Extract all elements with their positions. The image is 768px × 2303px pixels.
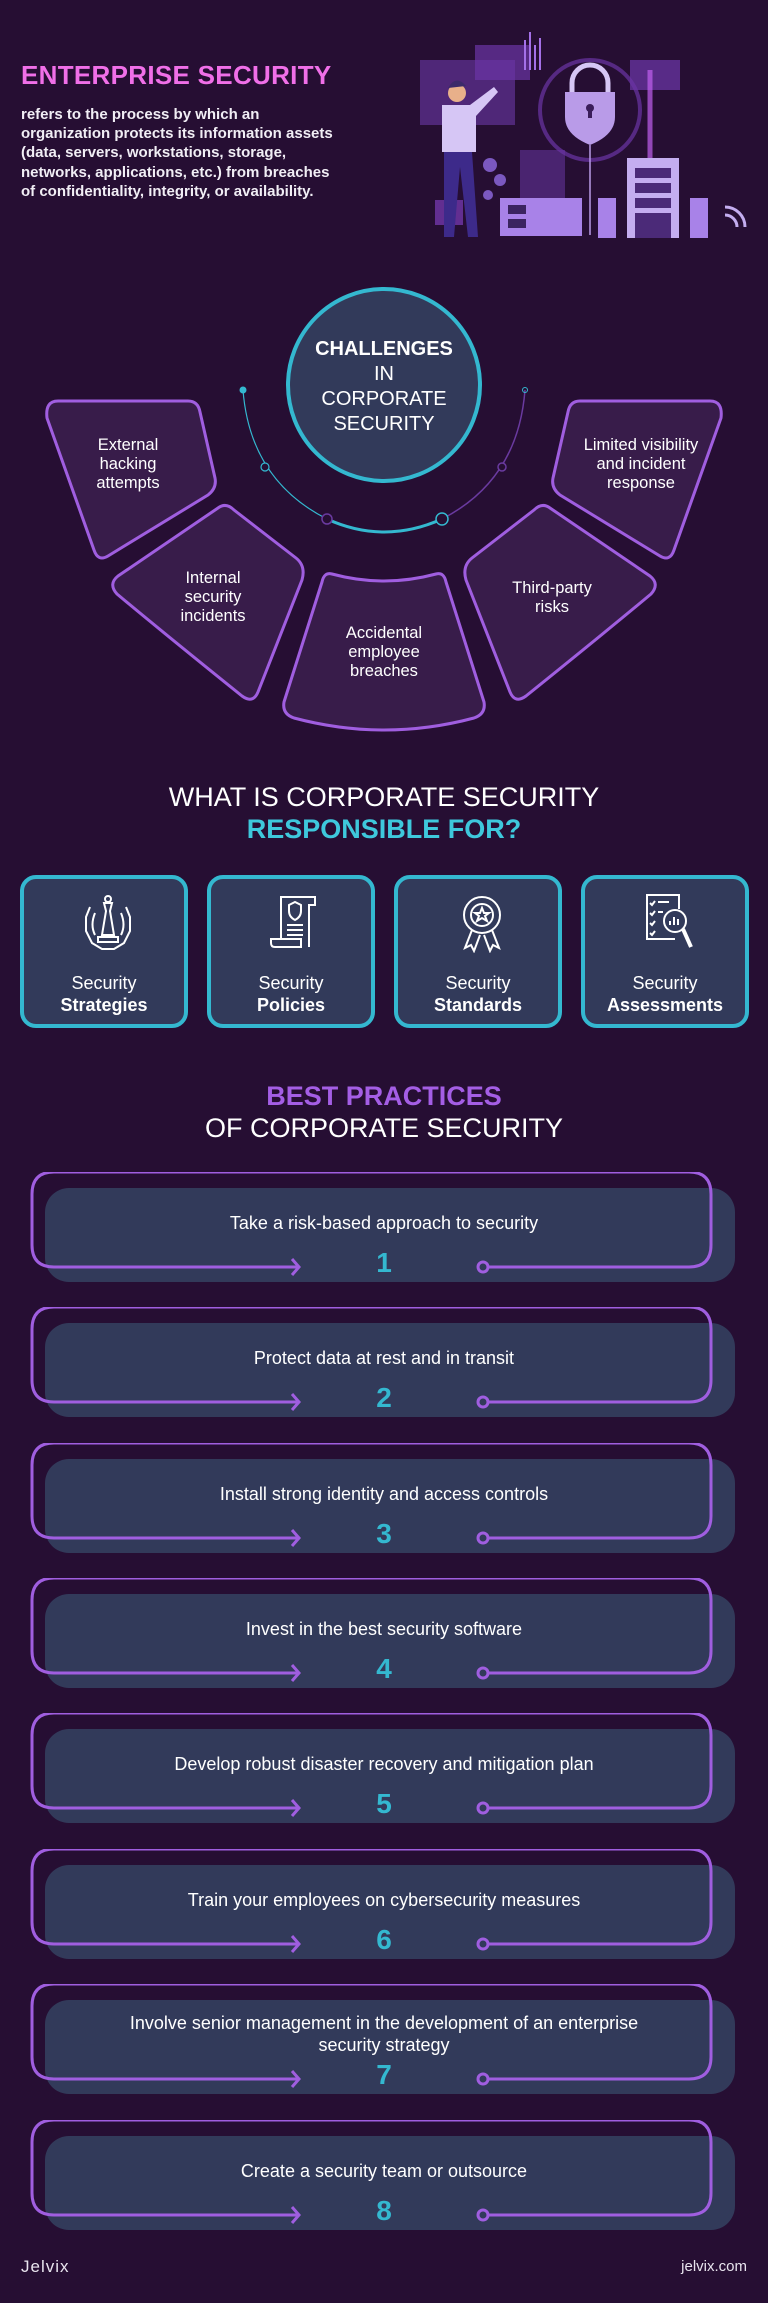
practice 4: 4 <box>376 1653 392 1684</box>
practice 4: Invest in the best security software <box>246 1619 522 1639</box>
challenge: external hacking: hacking <box>100 455 156 473</box>
practice 7: 7 <box>376 2059 392 2090</box>
challenge: external hacking: attempts <box>96 474 160 492</box>
card: assessments: Assessments <box>607 995 723 1015</box>
practice 8: 8 <box>376 2195 392 2226</box>
center circle: CHALLENGES <box>315 338 453 360</box>
challenge: third-party: Third-party <box>512 579 593 597</box>
card: standards <box>394 875 562 1028</box>
footer url: jelvix.com <box>681 2258 747 2275</box>
center circle: CORPORATE <box>321 388 447 410</box>
challenge: internal security: Internal <box>185 569 241 587</box>
challenge: limited visibility: Limited visibility <box>584 436 699 454</box>
practice 1: Take a risk-based approach to security <box>230 1213 538 1233</box>
practice 3: Install strong identity and access controls <box>220 1484 548 1504</box>
icon: chess gear <box>85 895 131 950</box>
center circle: SECURITY <box>333 413 435 435</box>
card: strategies: Security <box>71 973 137 993</box>
icon: award badge <box>463 896 501 953</box>
heading: best practices <box>205 1081 563 1143</box>
intro text: of confidentiality, integrity, or availability. <box>21 183 314 200</box>
heading: responsibilities: WHAT IS CORPORATE SECURITY <box>169 782 599 812</box>
card: standards: Security <box>445 973 511 993</box>
center circle: IN <box>374 363 394 385</box>
intro text: networks, applications, etc.) from breaches <box>21 164 329 181</box>
card: assessments <box>581 875 749 1028</box>
challenge: limited visibility: response <box>607 474 675 492</box>
practice 6: Train your employees on cybersecurity measures <box>188 1890 580 1910</box>
practice 1: 1 <box>376 1247 392 1278</box>
challenge: accidental employee: Accidental <box>346 624 422 642</box>
card: standards: Standards <box>434 995 522 1015</box>
challenge: accidental employee <box>284 574 484 730</box>
practice 5: 5 <box>376 1788 392 1819</box>
challenge: third-party <box>465 505 655 699</box>
arc connector <box>240 386 528 532</box>
title: ENTERPRISE SECURITY <box>21 60 332 90</box>
card: strategies: Strategies <box>60 995 148 1015</box>
practice 3 <box>30 1443 735 1553</box>
challenge: accidental employee: employee <box>348 643 420 661</box>
intro text: refers to the process by which an <box>21 106 259 123</box>
intro text: (data, servers, workstations, storage, <box>21 144 286 161</box>
challenge: external hacking <box>47 401 215 558</box>
heading: best practices: OF CORPORATE SECURITY <box>205 1113 563 1143</box>
challenge: internal security <box>113 505 303 699</box>
challenge: limited visibility: and incident <box>596 455 686 473</box>
practice 5 <box>30 1713 735 1823</box>
challenge: limited visibility <box>553 401 721 558</box>
practice 8: Create a security team or outsource <box>241 2161 527 2181</box>
card: policies <box>207 875 375 1028</box>
card: assessments: Security <box>632 973 698 993</box>
practice 7 <box>30 1984 735 2094</box>
heading: best practices: BEST PRACTICES <box>266 1081 502 1111</box>
practice 1 <box>30 1172 735 1282</box>
practice 7: security strategy <box>318 2035 450 2055</box>
heading: responsibilities <box>168 782 599 844</box>
practice 2 <box>30 1307 735 1417</box>
challenge: third-party: risks <box>535 598 569 616</box>
practice 6 <box>30 1849 735 1959</box>
practice 3: 3 <box>376 1518 392 1549</box>
icon: policy scroll <box>270 896 316 948</box>
practice 6: 6 <box>376 1924 392 1955</box>
heading: responsibilities: RESPONSIBLE FOR? <box>247 814 521 844</box>
challenge: accidental employee: breaches <box>350 662 418 680</box>
practice 4 <box>30 1578 735 1688</box>
practice 2: Protect data at rest and in transit <box>254 1348 514 1368</box>
practice 5: Develop robust disaster recovery and mitigation plan <box>174 1754 594 1774</box>
center circle <box>288 289 480 481</box>
practice 7: Involve senior management in the development of an enterprise <box>130 2013 638 2033</box>
practice 8 <box>30 2120 735 2230</box>
card: policies: Policies <box>257 995 325 1015</box>
card: strategies <box>20 875 188 1028</box>
intro text: organization protects its information assets <box>21 125 333 142</box>
card: policies: Security <box>258 973 324 993</box>
footer logo: Jelvix <box>21 2257 70 2276</box>
illustration: security hero <box>420 32 746 238</box>
challenge: internal security: security <box>185 588 242 606</box>
challenge: internal security: incidents <box>180 607 246 625</box>
challenges diagram <box>45 287 723 732</box>
practice 2: 2 <box>376 1382 392 1413</box>
icon: report magnifier <box>646 894 693 948</box>
intro text <box>21 106 333 200</box>
challenge: external hacking: External <box>98 436 158 454</box>
